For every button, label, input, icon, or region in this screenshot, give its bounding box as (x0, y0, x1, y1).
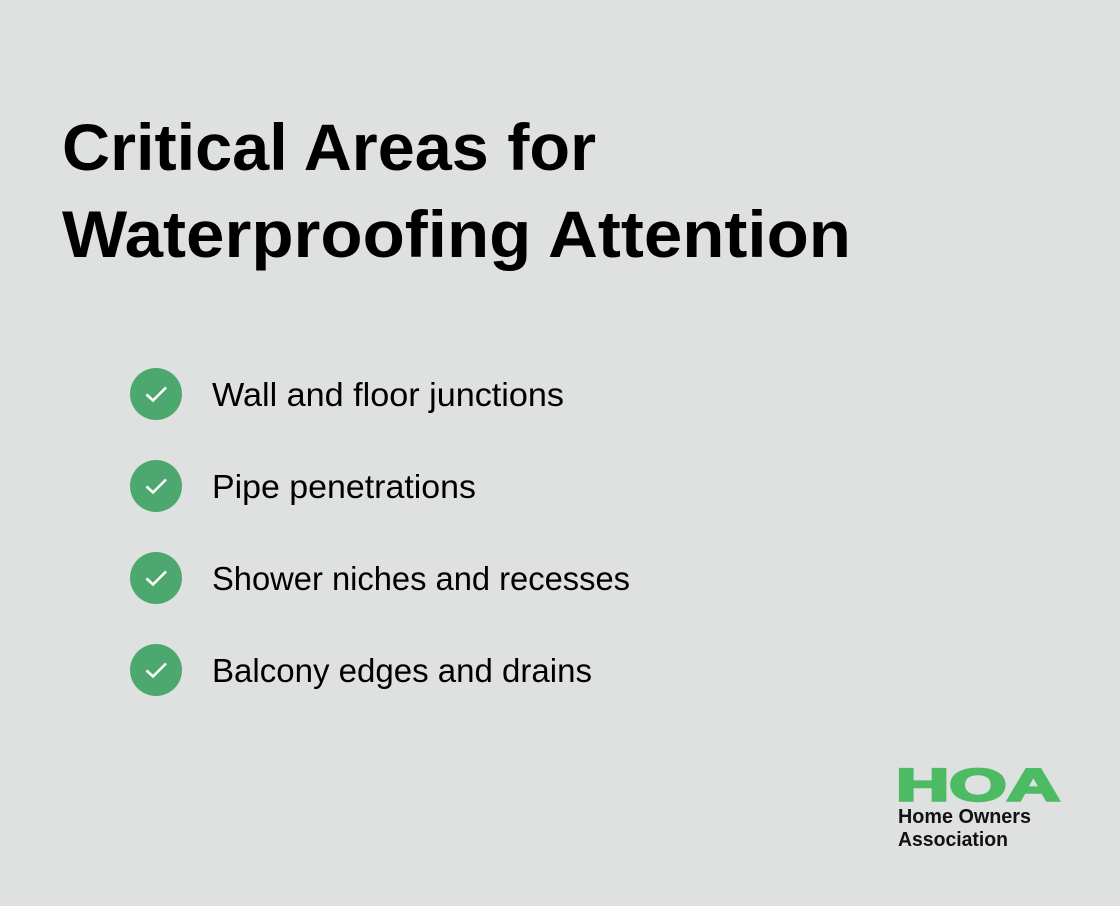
item: pipe penetrations: Pipe penetrations (212, 468, 476, 505)
item: wall and floor junctions (130, 368, 564, 420)
title: Critical Areas for (62, 110, 596, 184)
logo: HOA Home Owners Association: Home Owners (898, 806, 1031, 828)
item: pipe penetrations (130, 460, 476, 512)
item: shower niches and recesses (130, 552, 630, 604)
item: balcony edges and drains: Balcony edges and drains (212, 652, 592, 689)
item: shower niches and recesses: Shower niches and recesses (212, 560, 630, 597)
item: balcony edges and drains (130, 644, 592, 696)
logo: HOA Home Owners Association (896, 760, 1060, 851)
logo: HOA Home Owners Association: Association (898, 829, 1008, 851)
title: Waterproofing Attention (62, 197, 851, 271)
title (62, 110, 851, 271)
checklist (130, 368, 630, 696)
logo: HOA Home Owners Association: HOA (896, 760, 1060, 810)
item: wall and floor junctions: Wall and floor junctions (212, 376, 564, 413)
